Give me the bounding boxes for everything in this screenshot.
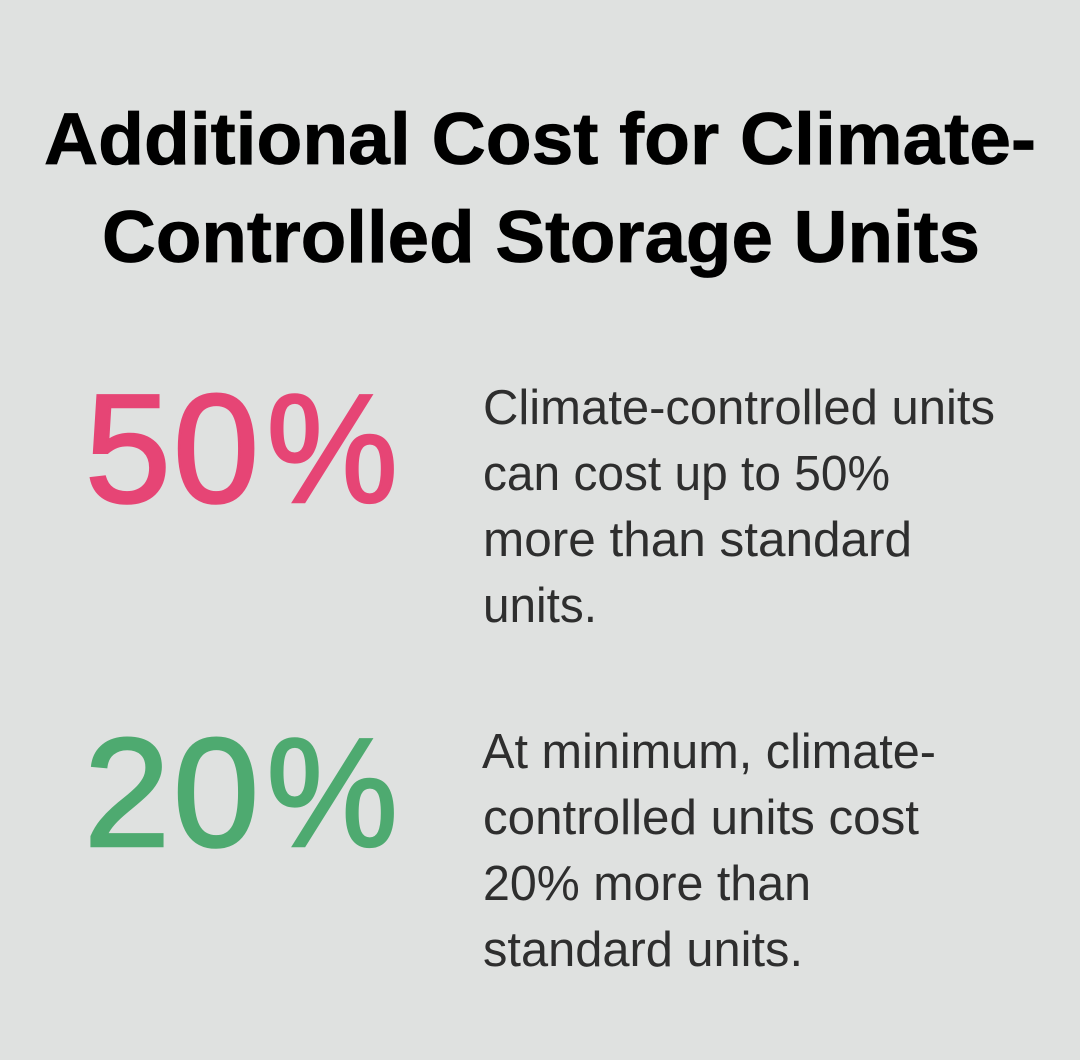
stat: 50% [85, 362, 398, 535]
text block: 20% description: standard units. [483, 923, 803, 977]
stat: 50%: % [266, 362, 398, 535]
text block: 50% description: units. [483, 579, 597, 633]
text block: 20% description [482, 725, 936, 977]
title: Controlled Storage Units [102, 197, 980, 278]
title [44, 99, 1036, 278]
stat: 20%: % [266, 706, 398, 879]
text block: 20% description: 20% more than [483, 857, 811, 911]
stat: 50%: 5 [85, 362, 171, 535]
stat: 50%: 0 [173, 362, 259, 535]
text block: 50% description: more than standard [483, 513, 912, 567]
stat: 20%: 0 [173, 706, 259, 879]
text block: 20% description: At minimum, climate- [482, 725, 936, 779]
text block: 50% description [483, 381, 995, 633]
stat: 20% [84, 706, 398, 879]
text block: 50% description: Climate-controlled units [483, 381, 995, 435]
title: Additional Cost for Climate- [44, 99, 1036, 180]
text block: 50% description: can cost up to 50% [483, 447, 890, 501]
text block: 20% description: controlled units cost [483, 791, 919, 845]
stat: 20%: 2 [84, 706, 170, 879]
